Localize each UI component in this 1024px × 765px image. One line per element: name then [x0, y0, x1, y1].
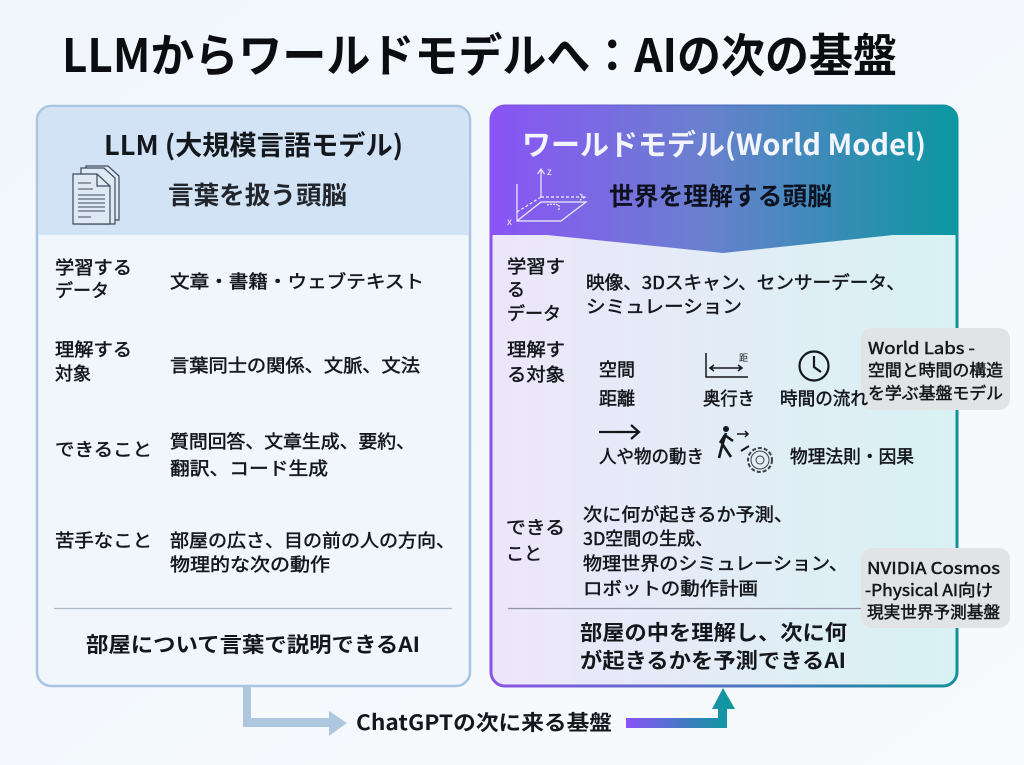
callout: NVIDIA Cosmos: -Physical AI向け [865, 577, 993, 601]
row label: understanding: 理解する [55, 336, 132, 362]
row label: can do: こと [506, 540, 542, 566]
label: depth: 奥行き [703, 385, 755, 411]
World Model summary: が起きるかを予測できるAI [580, 645, 846, 675]
row label: data: 学習する [55, 254, 132, 280]
row text: data: シミュレーション [586, 293, 742, 319]
label: physics: 物理法則・因果 [790, 443, 914, 469]
row label: data: データ [507, 300, 561, 326]
icon: depth: 距 [739, 351, 748, 364]
item: space and distance: 空間 [599, 356, 635, 382]
row label: understanding [507, 336, 565, 387]
label: flow of time: 時間の流れ [780, 385, 868, 411]
row text: understanding: 言葉同士の関係、文脈、文法 [170, 352, 420, 378]
World Model heading: ワールドモデル(World Model) [522, 122, 926, 164]
callout: World Labs [861, 328, 1010, 410]
callout: NVIDIA Cosmos: NVIDIA Cosmos [867, 555, 1000, 579]
row label: understanding: 対象 [55, 360, 91, 386]
icon: 3D axes [507, 163, 586, 228]
callout: NVIDIA Cosmos: 現実世界予測基盤 [867, 599, 1000, 623]
caption: ChatGPTの次に来る基盤 [356, 707, 612, 737]
panel: World Model [490, 106, 958, 686]
row text: can do: 3D空間の生成、 [583, 525, 713, 551]
row text: data: 文章・書籍・ウェブテキスト [170, 268, 424, 294]
row text: data [586, 269, 905, 319]
callout: NVIDIA Cosmos [861, 548, 1010, 628]
row text: weak: 物理的な次の動作 [170, 551, 330, 577]
row text: weak [170, 527, 455, 577]
row text: data: 映像、3Dスキャン、センサーデータ、 [586, 269, 905, 295]
icon: depth [706, 351, 748, 377]
LLM header band [38, 107, 469, 235]
row label: data [507, 253, 565, 326]
row label: data [55, 254, 132, 303]
icon: 3D axes: z [547, 163, 552, 178]
row text: weak: 部屋の広さ、目の前の人の方向、 [170, 527, 455, 553]
row label: can do: できる [506, 514, 565, 540]
row label: understanding [55, 336, 132, 386]
LLM heading: LLM (大規模言語モデル) [104, 124, 403, 163]
icon: clock [800, 352, 828, 380]
row text: can do: ロボットの動作計画 [583, 575, 758, 601]
label: motion: 人や物の動き [599, 443, 704, 469]
item: space and distance: 距離 [599, 385, 635, 411]
callout: World Labs: を学ぶ基盤モデル [868, 380, 1003, 404]
row label: can do: できること [55, 436, 152, 462]
World Model subheading: 世界を理解する頭脳 [609, 177, 832, 213]
row label: understanding: 理解す [507, 336, 565, 362]
icon: documents [73, 166, 119, 224]
row label: data: る [507, 276, 525, 302]
title: LLMからワールドモデルへ：AIの次の基盤 [62, 20, 897, 86]
icon: 3D axes: x [507, 213, 512, 228]
callout: World Labs: World Labs - [868, 335, 975, 359]
row text: can do: 質問回答、文章生成、要約、 [170, 428, 415, 454]
icon: long arrow [599, 425, 639, 439]
row label: understanding: る対象 [507, 361, 565, 387]
row text: can do: 翻訳、コード生成 [170, 455, 328, 481]
row text: can do [583, 501, 848, 601]
panel: LLM [37, 106, 470, 686]
row label: data: データ [55, 277, 109, 303]
arrow: caption to World Model [626, 688, 735, 728]
LLM summary: 部屋について言葉で説明できるAI [86, 629, 420, 659]
LLM subheading: 言葉を扱う頭脳 [168, 176, 347, 212]
World Model summary [580, 617, 847, 675]
icon: gear [748, 448, 772, 472]
World Model header band [490, 106, 958, 253]
row text: can do: 次に何が起きるか予測、 [583, 501, 793, 527]
World Model summary: 部屋の中を理解し、次に何 [580, 617, 847, 647]
icon: walking person [719, 426, 749, 458]
item: space and distance [599, 356, 635, 411]
row label: can do [506, 514, 565, 566]
callout: World Labs: 空間と時間の構造 [868, 357, 1003, 381]
row text: can do [170, 428, 415, 481]
row label: data: 学習す [507, 253, 565, 279]
arrow: LLM to caption [243, 687, 347, 736]
row label: weak: 苦手なこと [55, 527, 152, 553]
row text: can do: 物理世界のシミュレーション、 [583, 550, 848, 576]
